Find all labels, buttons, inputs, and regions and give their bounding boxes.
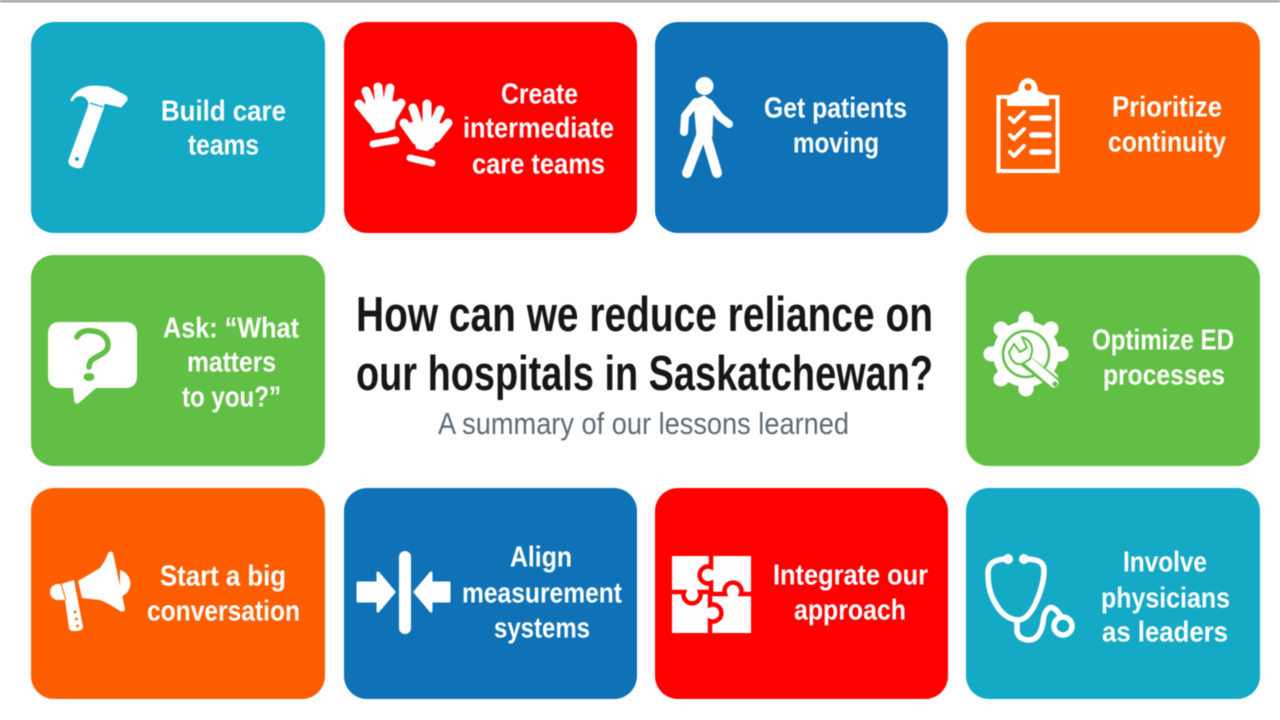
text: Involve physicians as leaders: Involve — [1123, 546, 1207, 578]
icon: gear and wrench — [991, 319, 1061, 389]
text: Optimize ED processes: Optimize ED — [1092, 324, 1234, 356]
text: Start a big conversation: Start a big — [160, 560, 286, 592]
title: our hospitals in Saskatchewan? — [356, 347, 933, 401]
text: Prioritize continuity: continuity — [1108, 126, 1226, 158]
title — [356, 288, 933, 401]
subtitle: A summary of our lessons learned — [438, 406, 849, 441]
text: Integrate our approach — [773, 559, 928, 626]
text: Prioritize continuity — [1108, 91, 1226, 158]
text: Get patients moving: moving — [793, 127, 879, 159]
panel: Get patients moving — [655, 22, 948, 233]
icon: arrows converging on a bar — [358, 551, 449, 634]
text: Create intermediate care teams: Create — [501, 78, 578, 110]
text: Prioritize continuity: Prioritize — [1112, 91, 1222, 123]
text: Start a big conversation: conversation — [147, 595, 300, 627]
text: Optimize ED processes — [1092, 324, 1234, 391]
text: Create intermediate care teams — [463, 78, 614, 180]
icon: gloves — [359, 87, 448, 163]
icon: puzzle pieces — [671, 555, 752, 634]
title: How can we reduce reliance on — [356, 288, 933, 342]
text: Ask What matters to you: to you?” — [182, 381, 281, 413]
text: Integrate our approach: Integrate our — [773, 559, 928, 591]
panel: Ask what matters to you — [31, 255, 325, 466]
text: Align measurement systems: measurement — [462, 577, 622, 609]
text: Involve physicians as leaders: physicians — [1101, 582, 1230, 614]
text: Involve physicians as leaders: as leaders — [1102, 616, 1228, 648]
text: Optimize ED processes: processes — [1103, 359, 1225, 391]
text: Align measurement systems — [462, 541, 622, 644]
panel: Involve physicians as leaders — [966, 488, 1260, 699]
text: Build care teams: Build care — [161, 95, 286, 127]
text: Ask What matters to you: matters — [187, 346, 276, 378]
text: Get patients moving — [764, 92, 907, 159]
panel: Optimize ED processes — [966, 255, 1260, 466]
icon: hammer — [69, 86, 127, 168]
panel: Create intermediate care teams — [344, 22, 637, 233]
text: Align measurement systems: Align — [510, 541, 572, 573]
text: Align measurement systems: systems — [494, 612, 590, 644]
text: Create intermediate care teams: intermediate — [463, 112, 614, 144]
text: Create intermediate care teams: care teams — [472, 148, 605, 180]
icon: walking person — [684, 77, 729, 173]
panel: Build care teams — [31, 22, 325, 233]
panel: Align measurement systems — [344, 488, 637, 699]
icon: question speech bubble — [48, 322, 137, 404]
text: Build care teams — [161, 95, 286, 161]
text: Start a big conversation — [147, 560, 300, 627]
text: Build care teams: teams — [188, 129, 259, 161]
text: Get patients moving: Get patients — [764, 92, 907, 124]
panel: Prioritize continuity — [966, 22, 1260, 233]
icon: megaphone — [50, 552, 130, 631]
text: Involve physicians as leaders — [1101, 546, 1230, 648]
icon: stethoscope — [988, 554, 1072, 640]
panel: Start a big conversation — [31, 488, 325, 699]
text: Integrate our approach: approach — [794, 594, 906, 626]
text: Ask What matters to you — [163, 312, 299, 413]
text: Ask What matters to you: Ask: “What — [163, 312, 299, 344]
icon: clipboard checklist — [998, 78, 1058, 171]
panel: Integrate our approach — [655, 488, 948, 699]
